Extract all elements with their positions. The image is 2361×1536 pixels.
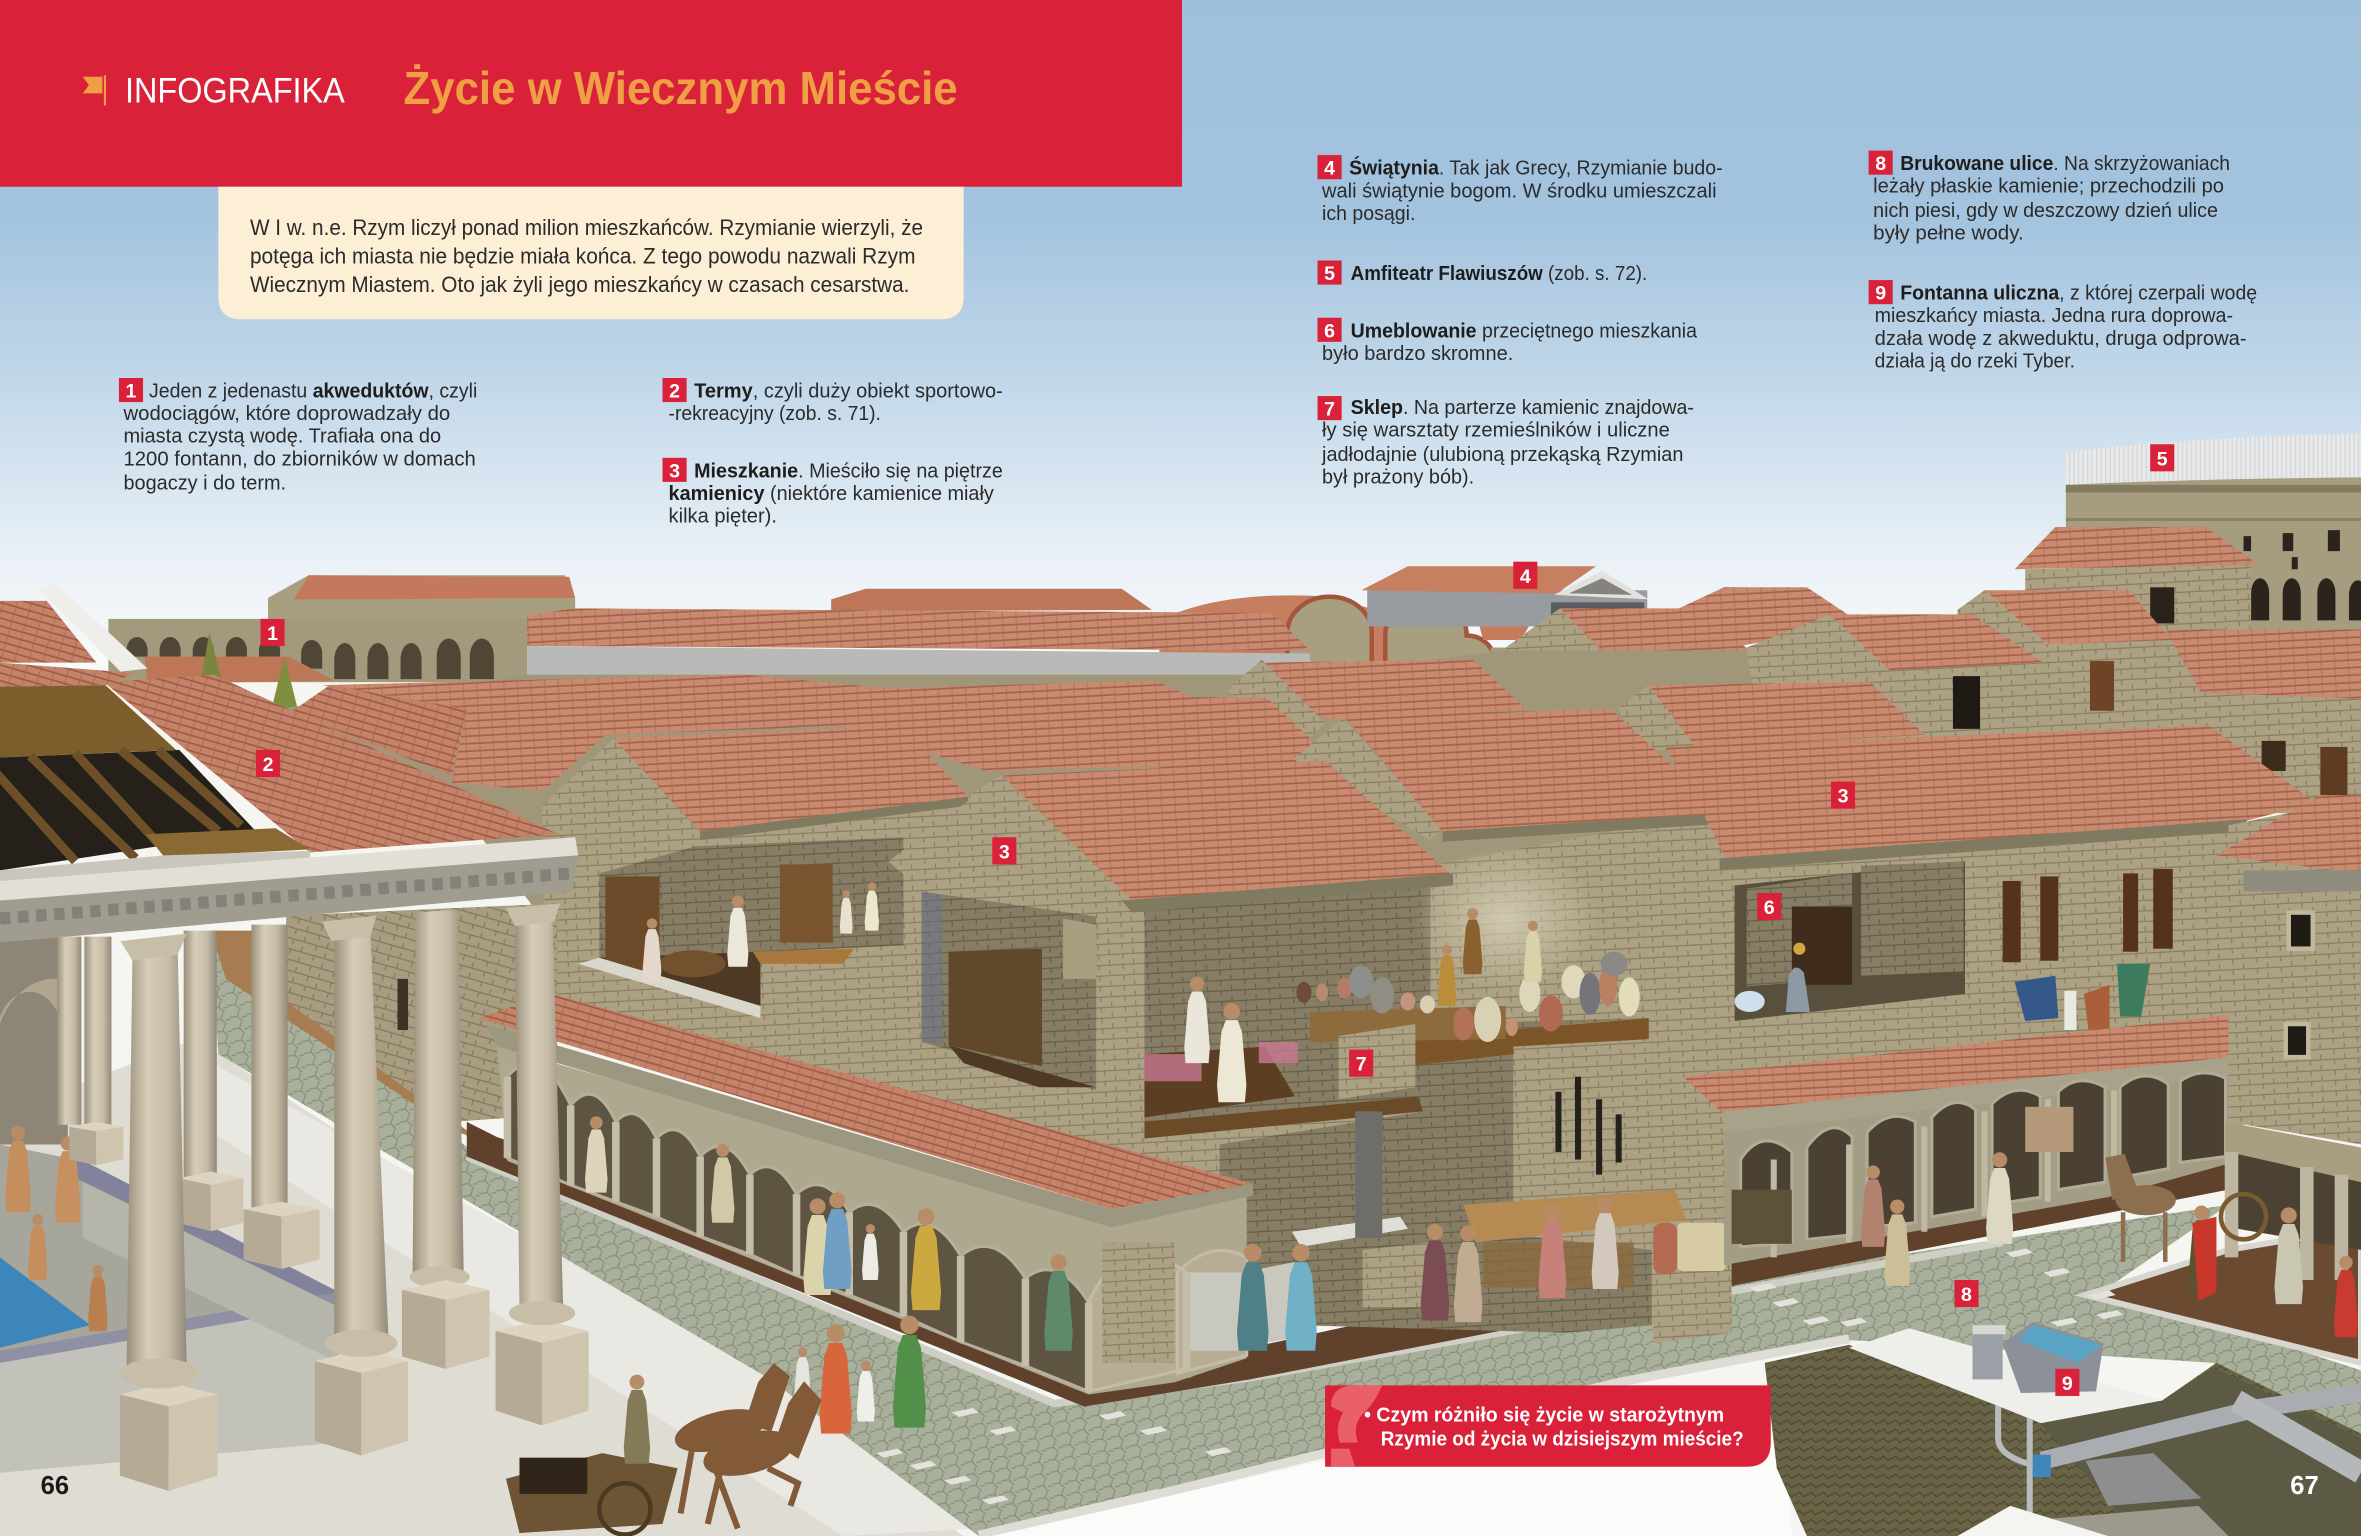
item 7: shop: 7 bbox=[1324, 399, 1335, 421]
map markers: 4 bbox=[1520, 566, 1531, 588]
building base fill behind roofs bbox=[286, 651, 1762, 919]
aqueduct bbox=[108, 619, 538, 684]
street and plaza ground bbox=[0, 931, 2361, 1536]
map markers: 5 bbox=[2157, 448, 2168, 470]
item 4: temple: wali świątynie bogom. W środku umieszczali bbox=[1321, 179, 1717, 202]
roof A (left house) bbox=[613, 726, 968, 840]
item 7: shop: ły się warsztaty rzemieślników i uliczne bbox=[1322, 419, 1670, 442]
hanging laundry bbox=[2015, 964, 2150, 1030]
item 9: fountain: dzała wodę z akweduktu, druga odprowa- bbox=[1875, 327, 2247, 350]
map markers: 9 bbox=[2062, 1373, 2073, 1395]
roof bbox=[0, 601, 96, 663]
item 1: aqueducts: 1 bbox=[126, 381, 137, 403]
item 3: apartment: Mieszkanie. Mieściło się na piętrze bbox=[694, 459, 1003, 482]
distant buildings left bbox=[108, 575, 575, 711]
map markers: 2 bbox=[263, 754, 274, 776]
map markers: 6 bbox=[1764, 897, 1775, 919]
item 8: paved streets: leżały płaskie kamienie; przechodzili po bbox=[1873, 175, 2224, 198]
page number left: 66 bbox=[41, 1472, 69, 1500]
intro box: potęga ich miasta nie będzie miała końca. Z tego powodu nazwali Rzym bbox=[250, 244, 915, 269]
item 7: shop: Sklep. Na parterze kamienic znajdowa- bbox=[1351, 396, 1694, 419]
item 6: furniture: 6 bbox=[1324, 320, 1335, 342]
question callout bbox=[1325, 1385, 1771, 1467]
room: empty apartment with wardrobe bbox=[922, 888, 1096, 1090]
room: upper left apartment bbox=[578, 837, 903, 1018]
question callout: Rzymie od życia w dzisiejszym mieście? bbox=[1381, 1429, 1744, 1451]
temple (item 4) bbox=[1361, 566, 1649, 626]
item 4: temple: ich posągi. bbox=[1322, 202, 1415, 225]
intro box bbox=[218, 187, 964, 319]
page number right: 67 bbox=[2290, 1472, 2319, 1500]
right arcade bbox=[1683, 1015, 2244, 1265]
question callout: • Czym różniło się życie w starożytnym bbox=[1364, 1405, 1724, 1427]
street fountain (item 9) bbox=[1849, 1322, 2162, 1423]
item 6: furniture: było bardzo skromne. bbox=[1322, 342, 1513, 365]
item 5: amphitheatre: Amfiteatr Flawiuszów (zob. s. 72). bbox=[1351, 262, 1647, 285]
item 8: paved streets: nich piesi, gdy w deszczowy dzień ulice bbox=[1873, 199, 2218, 222]
item 3: apartment: kamienicy (niektóre kamienice miały bbox=[669, 482, 995, 505]
item 9: fountain: mieszkańcy miasta. Jedna rura doprowa- bbox=[1875, 304, 2233, 327]
map markers: 3 bbox=[999, 841, 1010, 863]
item 7: shop: jadłodajnie (ulubioną przekąską Rzymian bbox=[1321, 443, 1683, 466]
item 2: baths: Termy, czyli duży obiekt sportowo- bbox=[694, 380, 1003, 403]
item 1: aqueducts: bogaczy i do term. bbox=[123, 471, 286, 494]
intro box: W I w. n.e. Rzym liczył ponad milion mieszkańców. Rzymianie wierzyli, że bbox=[250, 215, 923, 240]
icon: question mark bbox=[1331, 1385, 1382, 1467]
inner bath: pool, wall, bathers bbox=[0, 934, 339, 1473]
soldier shield bbox=[2192, 1217, 2216, 1301]
intro box: Wiecznym Miastem. Oto jak żyli jego mieszkańcy w czasach cesarstwa. bbox=[250, 272, 909, 297]
item 4: temple bbox=[1318, 155, 1723, 225]
lower page background bbox=[0, 678, 2361, 1536]
item 5: amphitheatre: 5 bbox=[1324, 263, 1335, 285]
room with furniture (item 6) bbox=[1735, 861, 1965, 1021]
item 9: fountain: 9 bbox=[1875, 283, 1886, 305]
icon: ribbon marker bbox=[83, 77, 102, 93]
item 6: furniture bbox=[1318, 318, 1698, 365]
item 9: fountain: działa ją do rzeki Tyber. bbox=[1875, 349, 2075, 372]
item 9: fountain: Fontanna uliczna, z której czerpali wodę bbox=[1900, 282, 2257, 305]
item 7: shop: był prażony bób). bbox=[1322, 465, 1474, 488]
back columns bbox=[57, 910, 490, 1369]
map markers: 1 bbox=[267, 623, 278, 645]
roof central front bbox=[888, 760, 1453, 922]
map markers bbox=[256, 444, 2174, 1396]
item 8: paved streets: Brukowane ulice. Na skrzyżowaniach bbox=[1900, 152, 2230, 175]
item 4: temple: 4 bbox=[1324, 158, 1335, 180]
stepping stones bbox=[876, 1248, 2123, 1504]
item 9: fountain bbox=[1869, 280, 2257, 372]
chariot and horses bbox=[506, 1364, 821, 1534]
map markers: 8 bbox=[1961, 1284, 1972, 1306]
main stone building mass bbox=[286, 718, 1732, 1355]
sky background bbox=[0, 0, 2361, 678]
title: Życie w Wiecznym Mieście bbox=[404, 62, 958, 114]
distant long roof and grey wall bbox=[527, 589, 1310, 697]
item 1: aqueducts: Jeden z jedenastu akweduktów, czyli bbox=[149, 380, 477, 403]
main roofs: back rows bbox=[291, 660, 1924, 791]
right horses and chariot bbox=[2108, 1157, 2266, 1262]
pottery on shop shelf bbox=[1296, 952, 1640, 1042]
right corner building bbox=[2216, 795, 2361, 1280]
section label: INFOGRAFIKA bbox=[125, 71, 345, 110]
item 1: aqueducts: miasta czystą wodę. Trafiała ona do bbox=[123, 425, 441, 448]
upper right houses bbox=[1491, 527, 2361, 813]
item 3: apartment: 3 bbox=[669, 460, 680, 482]
item 8: paved streets: były pełne wody. bbox=[1873, 221, 2024, 244]
item 4: temple: Świątynia. Tak jak Grecy, Rzymianie budo- bbox=[1349, 156, 1723, 180]
shop ground floor bbox=[1205, 1024, 1726, 1355]
item 2: baths: -rekreacyjny (zob. s. 71). bbox=[669, 402, 881, 425]
right wing bbox=[1665, 726, 2316, 1099]
item 7: shop bbox=[1318, 396, 1694, 488]
window shutters bbox=[2003, 869, 2173, 962]
people bbox=[585, 882, 2358, 1434]
front columns bbox=[120, 904, 589, 1491]
item 1: aqueducts: wodociągów, które doprowadzały do bbox=[122, 402, 450, 425]
item 2: baths bbox=[663, 378, 1003, 425]
item 1: aqueducts: 1200 fontann, do zbiorników w domach bbox=[123, 447, 476, 470]
item 2: baths: 2 bbox=[669, 381, 680, 403]
item 3: apartment: kilka pięter). bbox=[669, 505, 777, 528]
left temple (baths, item 2) bbox=[0, 584, 589, 1491]
excavation: aqueduct water pipes and soil bbox=[1765, 1345, 2361, 1536]
map markers: 7 bbox=[1356, 1054, 1367, 1076]
item 1: aqueducts bbox=[119, 378, 477, 494]
item 8: paved streets bbox=[1869, 151, 2230, 244]
item 6: furniture: Umeblowanie przeciętnego mieszkania bbox=[1351, 319, 1698, 342]
cypress trees bbox=[200, 632, 223, 685]
exposed wooden structure bbox=[0, 685, 176, 757]
item 8: paved streets: 8 bbox=[1875, 153, 1886, 175]
roof central back bbox=[1343, 709, 1724, 842]
room: dining room and workshop store bbox=[1144, 825, 1649, 1138]
item 3: apartment bbox=[663, 458, 1003, 528]
header banner bbox=[0, 0, 1182, 187]
Colosseum (item 5) bbox=[2066, 434, 2361, 648]
cornice and frieze bbox=[0, 837, 578, 901]
map markers: 3 bbox=[1838, 786, 1849, 808]
vaulted roofs bbox=[1159, 595, 1539, 690]
left arcade bbox=[479, 994, 1253, 1394]
